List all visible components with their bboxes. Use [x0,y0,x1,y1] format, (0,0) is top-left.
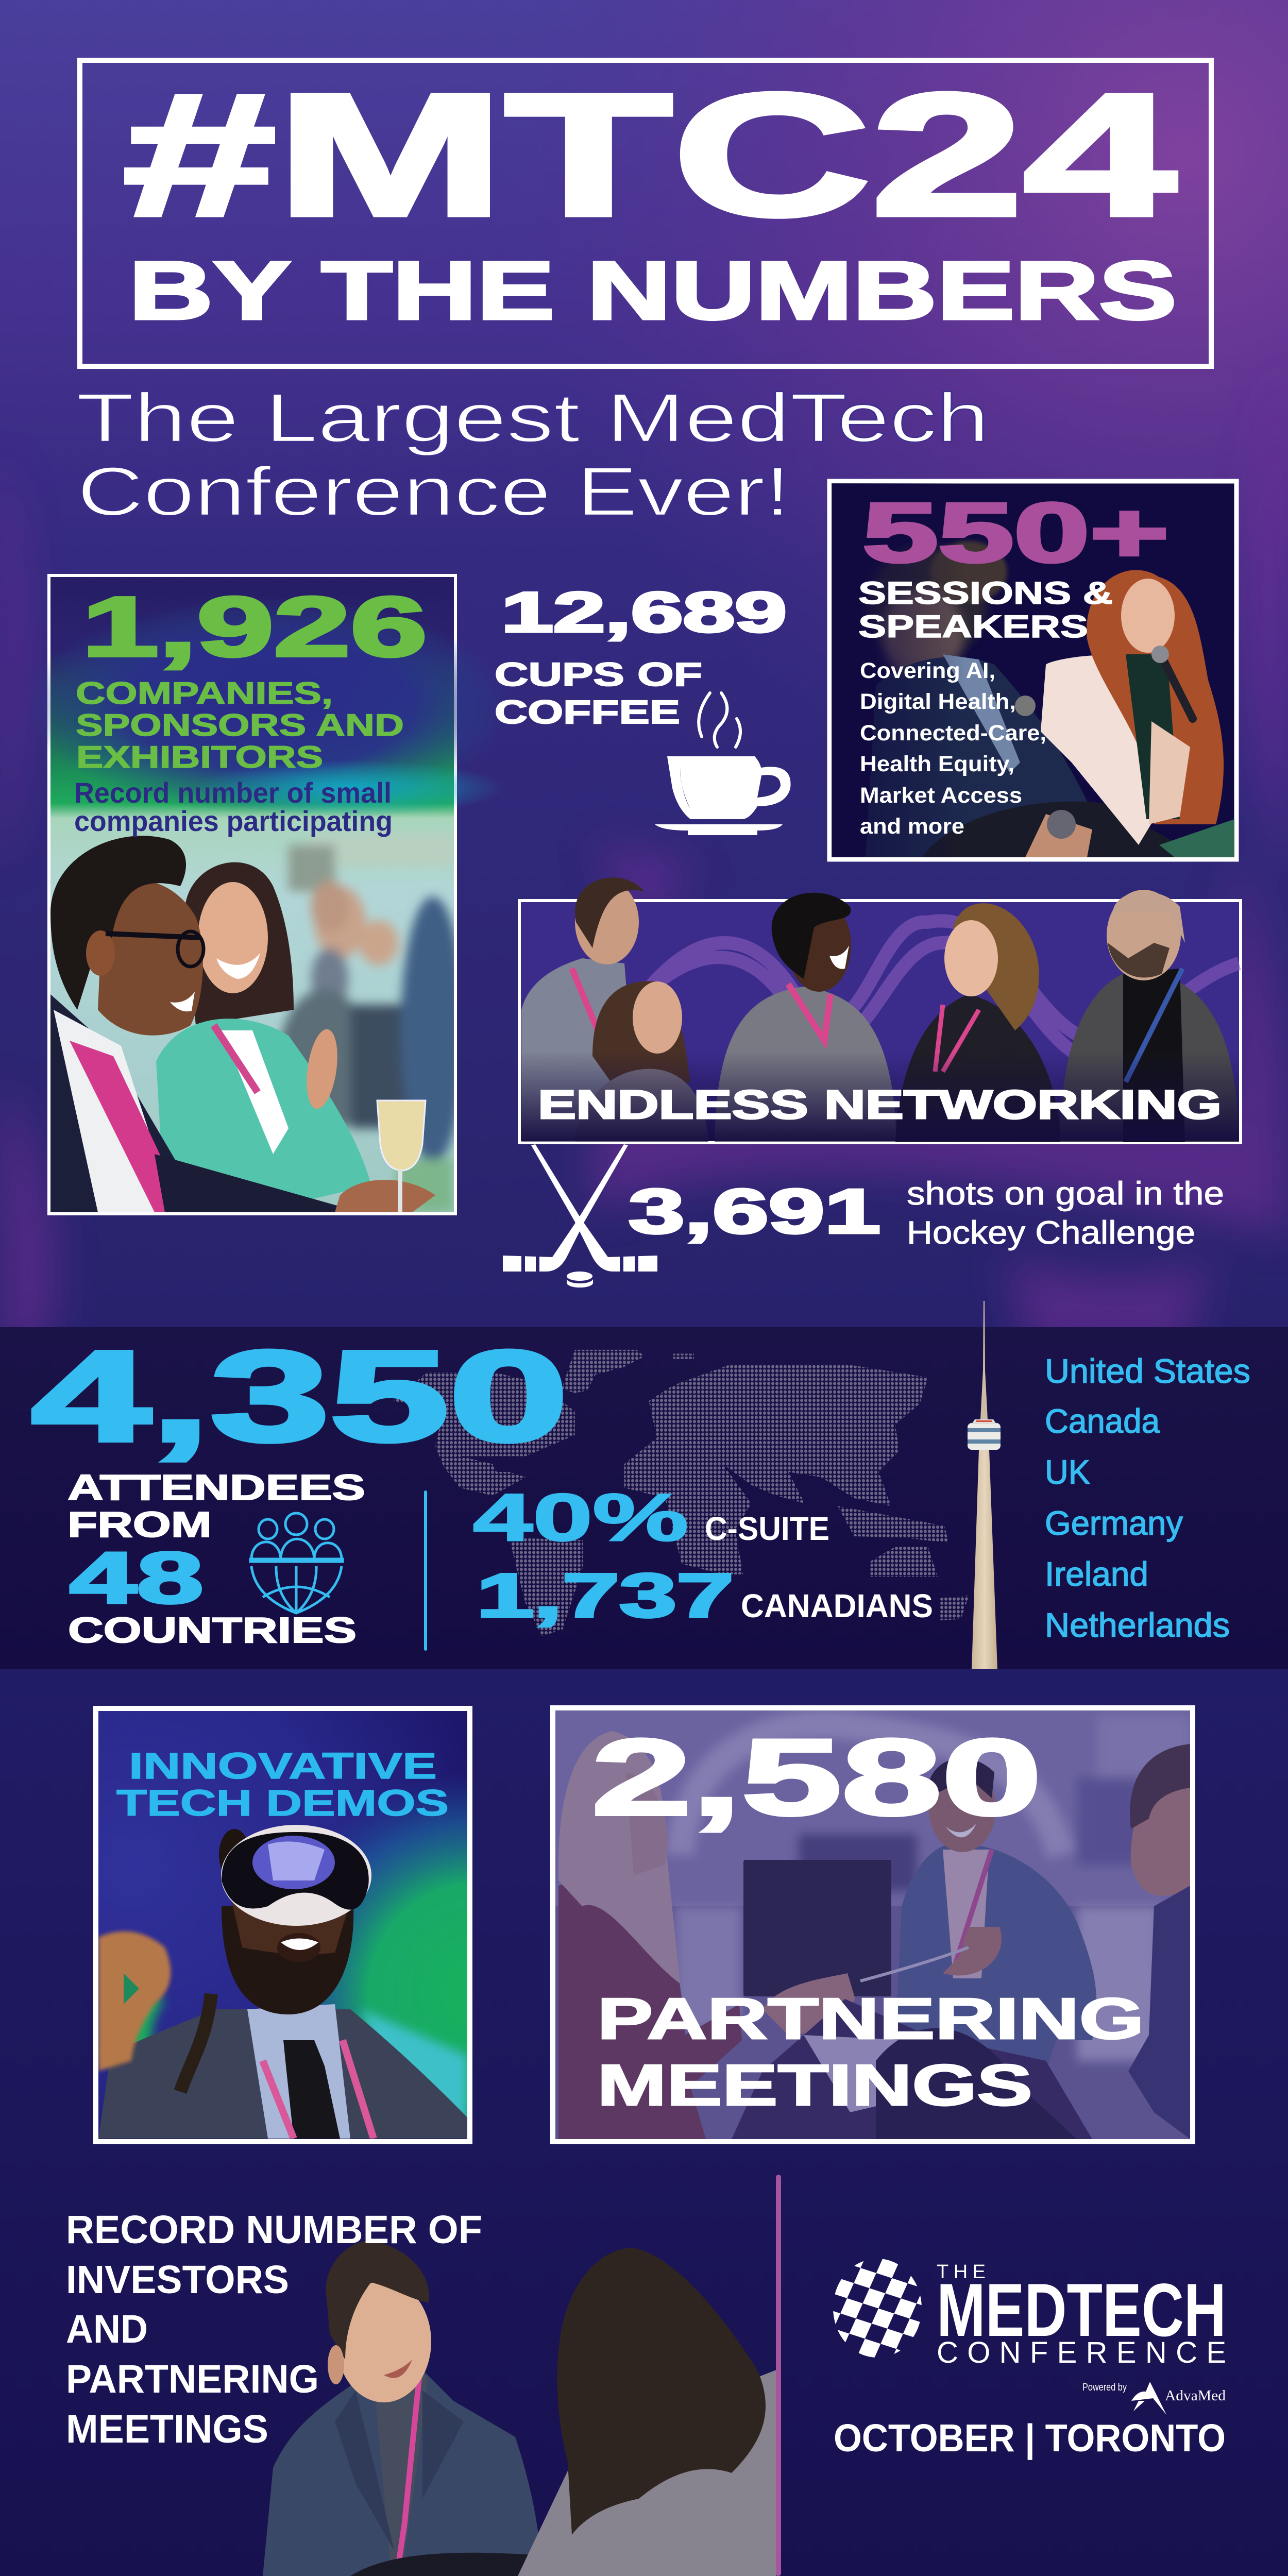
logo: the medtech conference: THE [937,2261,986,2283]
label: shots on goal [907,1176,1224,1251]
note: small companies [74,776,393,837]
photo: five people networking [521,877,1239,1142]
panel: partnering meetings [553,1708,1193,2142]
label: partnering meetings: MEETINGS [597,2053,1032,2117]
panel: attendees band [0,1301,1288,1669]
logo: the medtech conference: CONFERENCE [937,2336,1226,2369]
title: #MTC24: #MTC24 [123,57,1178,252]
logo: the medtech conference: AdvaMed [1165,2388,1226,2404]
label: sessions and speakers: SPEAKERS [858,609,1088,644]
number: 2,580: 2,580 [591,1717,1042,1838]
number: 3,691: 3,691 [629,1176,880,1246]
dotted world map [392,1345,974,1643]
woman from behind [518,2248,776,2576]
list: top countries: United States [1045,1352,1250,1390]
photo: panel speakers [866,541,1234,857]
hand and glass [335,1180,435,1212]
label: record number of investors: MEETINGS [66,2407,268,2451]
panel: innovative tech demos [96,1708,470,2142]
icon: coffee cup [655,756,791,835]
icon: checkered globe [832,2257,923,2360]
label: record number of investors: AND [66,2307,148,2351]
stat: coffee [495,581,791,835]
number: 4,350: 4,350 [31,1324,568,1468]
note: small companies: companies participating [74,805,393,837]
divider [776,2175,781,2576]
stat: hockey [503,1144,1224,1287]
label: record number of investors: INVESTORS [66,2258,289,2302]
photo: partnering demonstration [555,1710,1190,2139]
stat: 1,926: 1,926 [82,580,427,674]
title: by the numbers: BY THE NUMBERS [129,244,1177,336]
logo: the medtech conference: Powered by [1082,2382,1127,2393]
label: endless networking: ENDLESS NETWORKING [538,1081,1222,1127]
list: top countries: UK [1045,1453,1090,1491]
label: attendees from 48 countries: COUNTRIES [68,1610,357,1650]
label: sessions and speakers: SESSIONS & [858,575,1113,611]
stat: 550+: 550+ [862,485,1169,580]
panel background gradient [50,577,454,1212]
label: attendees from 48 countries: ATTENDEES [67,1467,365,1507]
list: top countries [1045,1352,1250,1644]
waves [618,921,1239,1061]
label: companies, sponsors and exhibitors: COMPANIES, [76,676,333,710]
stat: coffee: CUPS OF [495,656,702,693]
photo: investors meeting [263,2241,776,2576]
stat: coffee: 12,689 [501,581,787,644]
label: innovative tech demos: TECH DEMOS [116,1783,449,1824]
panel: companies [26,575,510,1214]
stat: 40% c-suite [473,1480,829,1555]
label: partnering meetings: PARTNERING [597,1986,1144,2051]
icon: steam [699,693,740,747]
icon: crossed hockey sticks [503,1144,657,1287]
list: top countries: Canada [1045,1402,1160,1440]
subtitle: The Largest MedTech [76,380,989,456]
topics list: and more [860,814,964,839]
subtitle: Conference Ever! [77,453,790,530]
divider [424,1490,427,1651]
list: top countries: Germany [1045,1504,1183,1542]
label: record number of investors: RECORD NUMBER OF [66,2208,482,2252]
title box [80,57,1211,366]
panel: sessions and speakers [829,481,1236,859]
list: top countries: Ireland [1045,1555,1148,1593]
icon: CN tower [968,1301,1001,1669]
label: record number of investors: PARTNERING [66,2357,319,2401]
topics list [860,658,1046,839]
photo: man and woman [50,835,465,1212]
stat: 1,737 canadians [477,1561,933,1630]
stat: 1,737 canadians: CANADIANS [741,1587,933,1624]
logo: the medtech conference [832,2257,1226,2415]
label: attendees from 48 countries: FROM [67,1504,212,1545]
label: record number of investors [66,2208,482,2451]
label: sessions and speakers [858,575,1113,644]
label: innovative tech demos: INNOVATIVE [129,1746,437,1787]
label: companies, sponsors and exhibitors: SPONSORS AND [76,708,404,742]
icon: people and globe [250,1513,343,1613]
panel: endless networking [519,877,1241,1143]
label: attendees from 48 countries [67,1467,365,1650]
man in suit [263,2241,541,2576]
label: innovative tech demos [116,1746,449,1824]
label: companies, sponsors and exhibitors [76,676,404,774]
topics list: Covering AI, [860,658,995,683]
label: october toronto: OCTOBER | TORONTO [834,2416,1226,2460]
subtitle [76,380,989,530]
label: companies, sponsors and exhibitors: EXHIBITORS [76,740,323,774]
stat: 40% c-suite: C-SUITE [705,1510,829,1547]
stat: coffee: COFFEE [495,693,680,731]
topics list: Market Access [860,783,1022,808]
label: shots on goal: Hockey Challenge [907,1215,1195,1251]
stat: 40% c-suite: 40% [473,1480,688,1555]
label: shots on goal: shots on goal in the [907,1176,1224,1212]
woman [185,862,294,1025]
label: partnering meetings [597,1986,1144,2117]
photo: man with headset [98,1711,467,2139]
note: small companies: Record number of small [74,776,392,809]
list: top countries: Netherlands [1045,1606,1230,1644]
icon: advamed mark [1131,2382,1166,2415]
stat: 1,737 canadians: 1,737 [477,1561,734,1630]
topics list: Health Equity, [860,752,1014,776]
topics list: Connected-Care, [860,721,1046,745]
label: attendees from 48 countries: 48 [70,1537,204,1618]
topics list: Digital Health, [860,689,1016,714]
man [50,994,175,1212]
